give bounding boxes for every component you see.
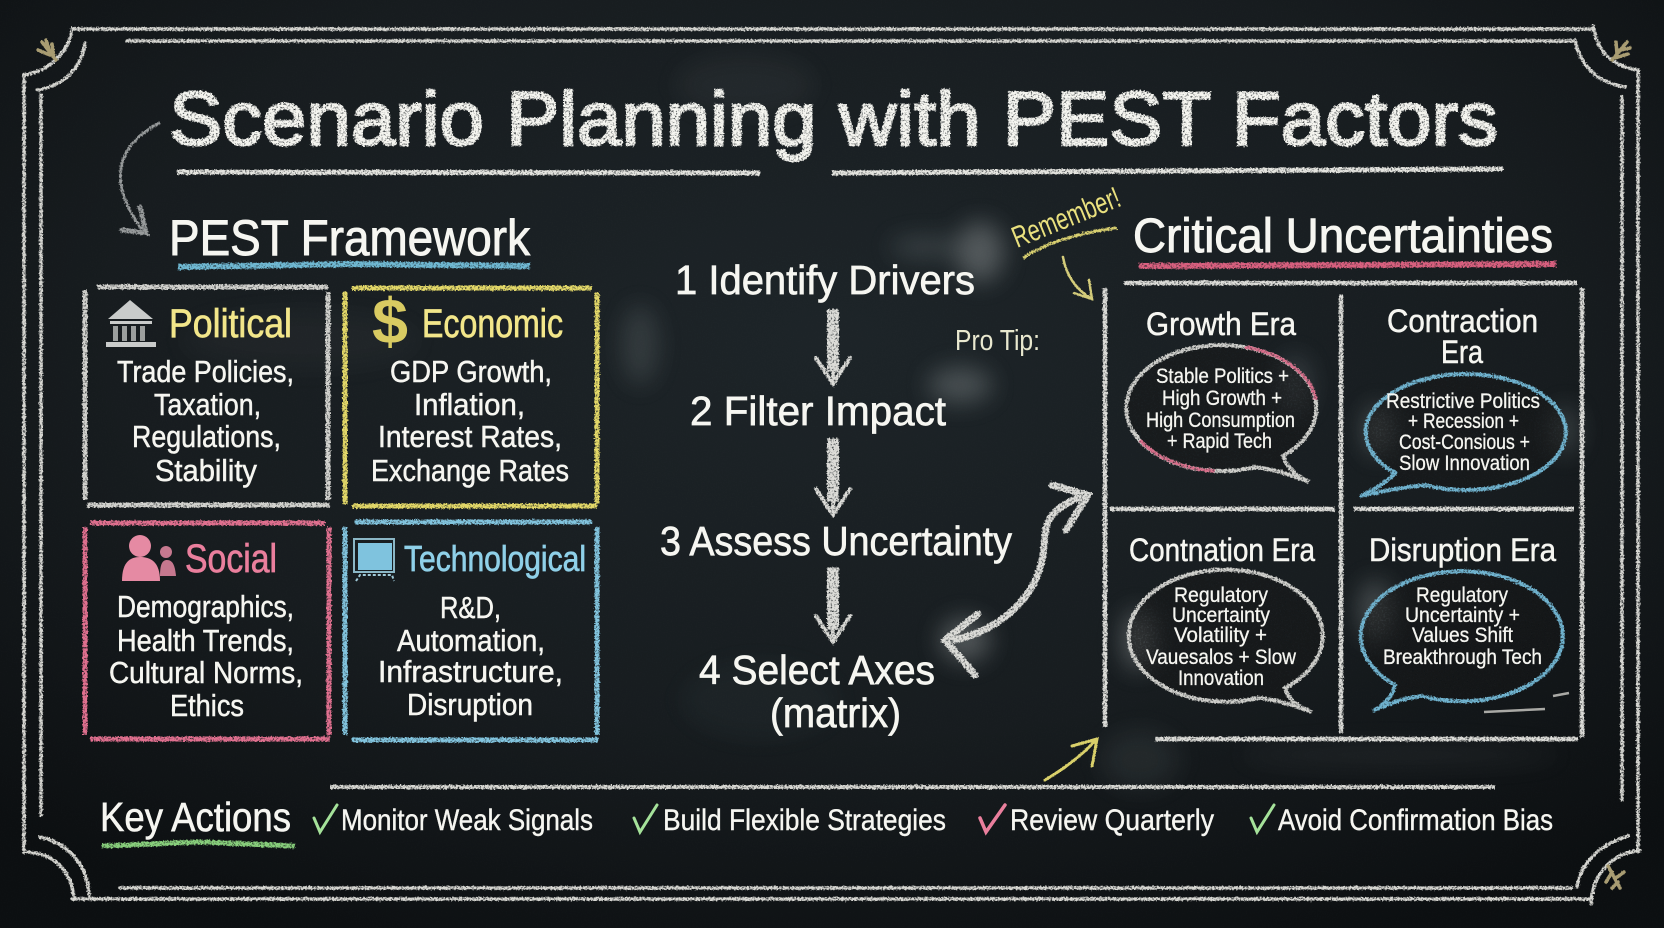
text: Technological factors: Automation, <box>397 623 545 658</box>
section heading: Critical Uncertainties: Critical Uncertainties <box>1133 210 1553 263</box>
bubble text: Volatility + <box>1174 624 1267 647</box>
key actions heading: Key Actions <box>100 794 291 840</box>
bubble text <box>1383 584 1542 669</box>
speech bubble <box>1361 571 1563 711</box>
heading: Technological: Technological <box>404 538 586 579</box>
arrow: step 3 to 4 <box>816 569 850 642</box>
icon: computer <box>354 539 394 581</box>
action: Monitor Weak Signals: Monitor Weak Signals <box>341 804 593 837</box>
icon: people <box>122 535 176 581</box>
text: Political factors <box>117 354 294 488</box>
text: Economic factors: GDP Growth, <box>390 354 552 389</box>
rule above key actions <box>330 785 1495 789</box>
text: Political factors: Stability <box>155 453 257 488</box>
step 3: 3 Assess Uncertainty <box>660 518 1012 564</box>
bubble text: Regulatory <box>1174 584 1268 607</box>
bubble text: Restrictive Politics <box>1386 390 1540 413</box>
arrow: yellow pointer to matrix <box>1045 739 1097 780</box>
arrow: double-headed matrix loop <box>945 485 1088 675</box>
text: Social factors: Health Trends, <box>117 623 294 658</box>
text: Social factors: Demographics, <box>117 589 294 624</box>
bubble text: Breakthrough Tech <box>1383 646 1542 669</box>
text: Technological factors: R&D, <box>440 590 501 625</box>
text: Technological factors: Infrastructure, <box>378 654 563 689</box>
step 2: 2 Filter Impact <box>690 388 947 434</box>
icon: dollar sign: $ <box>372 285 408 357</box>
text: Economic factors: Interest Rates, <box>378 419 562 454</box>
action: Review Quarterly: Review Quarterly <box>1010 804 1214 837</box>
quadrant: Contnation Era <box>1129 532 1323 712</box>
action: Build Flexible Strategies: Build Flexible Strategies <box>663 804 946 837</box>
text: Political factors: Regulations, <box>132 419 281 454</box>
text: Social factors: Ethics <box>170 688 244 723</box>
callout: Remember: Remember! <box>1007 181 1125 254</box>
arrow: Remember to matrix <box>1063 257 1092 299</box>
panel: Economic <box>345 285 597 506</box>
quadrant: Disruption Era: Disruption Era <box>1369 532 1556 568</box>
quadrant: Contraction Era <box>1360 303 1566 496</box>
text: Social factors <box>109 589 303 723</box>
process steps <box>660 257 1012 736</box>
step 1: 1 Identify Drivers <box>675 257 975 303</box>
icon: government building <box>106 300 156 347</box>
bubble text: Cost-Consious + <box>1399 431 1530 454</box>
section heading: PEST Framework: PEST Framework <box>169 210 531 266</box>
quadrant: Growth Era <box>1126 306 1316 482</box>
heading: Political: Political <box>169 302 292 346</box>
bubble text: Uncertainty + <box>1405 604 1520 627</box>
text: Technological factors: Disruption <box>407 687 533 722</box>
heading: Social: Social <box>185 537 277 581</box>
quadrant: Disruption Era <box>1361 532 1563 711</box>
text: Economic factors: Inflation, <box>414 387 525 422</box>
quadrant: Growth Era: Growth Era <box>1146 306 1296 342</box>
quadrant: Contraction Era: Contraction <box>1387 303 1538 339</box>
text: Economic factors <box>371 354 569 488</box>
bubble text: High Growth + <box>1162 387 1282 410</box>
matrix grid <box>1105 283 1582 739</box>
bubble text: Vauesalos + Slow <box>1146 646 1297 669</box>
speech bubble <box>1360 374 1566 496</box>
bubble text <box>1146 584 1297 690</box>
panel: Political <box>85 287 330 505</box>
action: Avoid Confirmation Bias: Avoid Confirmation Bias <box>1278 804 1553 837</box>
quadrant: Contraction Era: Era <box>1441 334 1483 370</box>
bubble text: Regulatory <box>1416 584 1508 607</box>
bubble text: Uncertainty <box>1172 604 1270 627</box>
title: Scenario Planning with PEST Factors <box>169 77 1498 162</box>
quadrant: Contnation Era: Contnation Era <box>1129 532 1315 568</box>
bubble text: High Consumption <box>1146 409 1295 432</box>
callout: Pro Tip: Pro Tip: <box>955 325 1040 357</box>
arrow: step 1 to 2 <box>816 311 850 384</box>
text: Political factors: Trade Policies, <box>117 354 294 389</box>
bubble text <box>1146 365 1295 453</box>
arrow: step 2 to 3 <box>816 440 850 515</box>
text: Economic factors: Exchange Rates <box>371 453 569 488</box>
panel: Social <box>85 523 330 739</box>
step 4: 4 Select Axes <box>699 647 935 693</box>
arrow: title to PEST framework <box>120 123 159 233</box>
bubble text: Values Shift <box>1412 624 1513 647</box>
text: Political factors: Taxation, <box>154 387 261 422</box>
heading: Economic: Economic <box>422 302 563 346</box>
callout: Remember <box>1007 181 1125 258</box>
step 4 continued: (matrix) <box>770 690 901 736</box>
bubble text: Slow Innovation <box>1399 452 1530 475</box>
text: Social factors: Cultural Norms, <box>109 655 303 690</box>
bubble text: Stable Politics + <box>1156 365 1289 388</box>
speech bubble <box>1126 345 1316 482</box>
bubble text <box>1386 390 1540 475</box>
panel: Technological <box>345 522 598 740</box>
bubble text: + Rapid Tech <box>1167 430 1272 453</box>
text: Technological factors <box>378 590 563 722</box>
panel: scenario matrix <box>1105 283 1582 739</box>
bubble text: + Recession + <box>1408 410 1519 433</box>
speech bubble <box>1129 570 1323 712</box>
bubble text: Innovation <box>1178 667 1264 690</box>
